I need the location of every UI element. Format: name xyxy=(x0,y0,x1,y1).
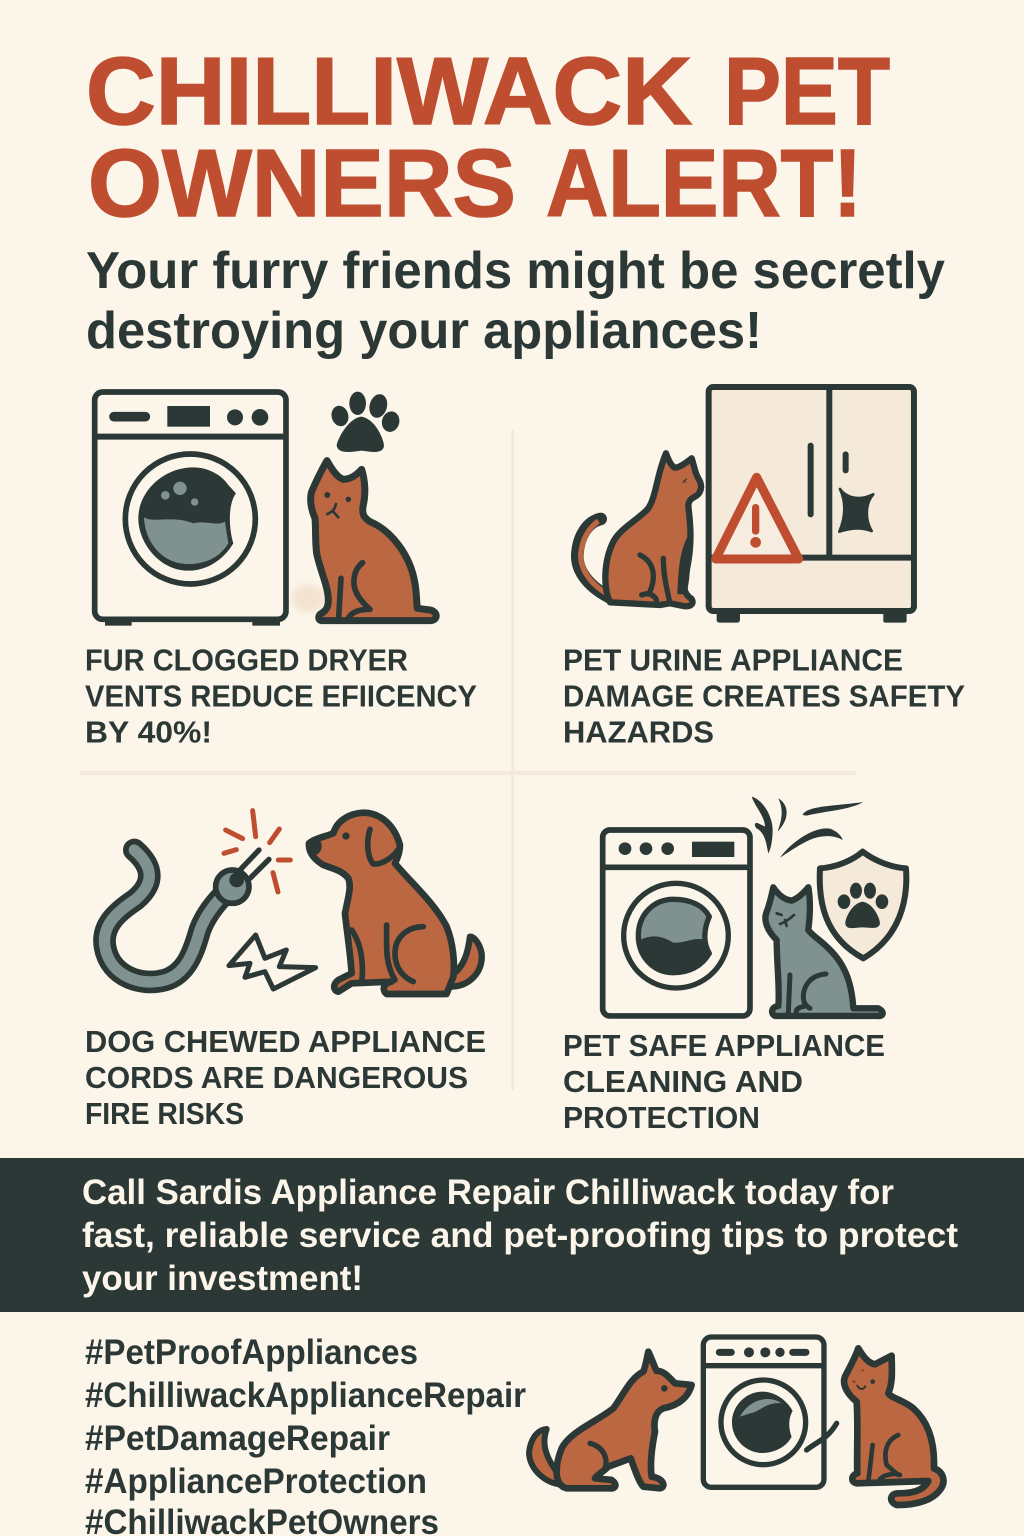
label: DOG CHEWED APPLIANCE xyxy=(85,1024,486,1059)
icon: lightning bolt xyxy=(229,935,316,989)
title: ALERT! xyxy=(546,130,862,237)
hashtags: #ChilliwackApplianceRepair xyxy=(85,1376,526,1415)
icon: washer xyxy=(603,830,750,1016)
icon: fridge xyxy=(709,387,914,623)
title: PET xyxy=(724,38,890,145)
illustration: cord, sparks and dog xyxy=(104,811,482,994)
label xyxy=(85,1024,486,1131)
label: CORDS ARE DANGEROUS xyxy=(85,1060,468,1095)
hashtags: #ApplianceProtection xyxy=(85,1462,427,1501)
title xyxy=(86,38,890,237)
icon: washer xyxy=(703,1337,837,1487)
label: PET SAFE APPLIANCE xyxy=(563,1028,885,1063)
icon: cat xyxy=(844,1348,943,1505)
panel: dog chewed appliance cords xyxy=(85,811,486,1131)
icon: brown dog xyxy=(307,813,482,994)
label: DAMAGE CREATES SAFETY xyxy=(563,678,965,714)
hashtags: #PetProofAppliances xyxy=(85,1333,418,1372)
subtitle xyxy=(86,242,945,360)
title: CHILLIWACK xyxy=(86,38,692,145)
label: FUR CLOGGED DRYER xyxy=(85,642,408,678)
icon: paw shield xyxy=(820,852,906,958)
call to action band xyxy=(0,1158,1024,1312)
label xyxy=(85,642,477,750)
icon: flying fur xyxy=(752,797,863,858)
label xyxy=(563,1028,885,1135)
illustration: washer, paw print and cat xyxy=(95,392,436,626)
panel: pet safe cleaning and protection xyxy=(563,797,906,1135)
icon: dog xyxy=(529,1352,692,1488)
hashtags xyxy=(85,1333,526,1536)
label: PROTECTION xyxy=(563,1100,760,1135)
icon: stain xyxy=(292,585,325,612)
panel: fur clogged dryer vents xyxy=(85,392,477,750)
illustration: washer, shield and cat xyxy=(603,797,906,1016)
subtitle: Your furry friends might be secretly xyxy=(86,242,945,300)
call to action band: fast, reliable service and pet-proofing tips to protect xyxy=(82,1216,958,1255)
label: BY 40%! xyxy=(85,714,212,750)
illustration: dog, washer and cat xyxy=(529,1337,943,1505)
label xyxy=(563,642,965,750)
icon: orange cat xyxy=(311,461,436,621)
icon: washer xyxy=(95,392,286,626)
title: OWNERS xyxy=(88,130,516,237)
icon: grey cat xyxy=(765,887,883,1016)
icon: orange cat xyxy=(577,453,701,606)
call to action band: your investment! xyxy=(82,1259,363,1298)
label: PET URINE APPLIANCE xyxy=(563,642,903,678)
illustration: cat, fridge and warning xyxy=(577,387,914,623)
subtitle: destroying your appliances! xyxy=(86,302,762,360)
icon: chewed cord xyxy=(104,850,269,982)
label: FIRE RISKS xyxy=(85,1096,244,1131)
icon: paw print xyxy=(329,392,402,452)
label: CLEANING AND xyxy=(563,1064,803,1099)
call to action band: Call Sardis Appliance Repair Chilliwack today for xyxy=(82,1173,894,1212)
icon: warning triangle xyxy=(716,477,799,559)
hashtags: #PetDamageRepair xyxy=(85,1419,390,1458)
label: HAZARDS xyxy=(563,714,714,750)
icon: sparks xyxy=(224,811,290,892)
panel: pet urine appliance damage xyxy=(563,387,965,750)
label: VENTS REDUCE EFIICENCY xyxy=(85,678,477,714)
